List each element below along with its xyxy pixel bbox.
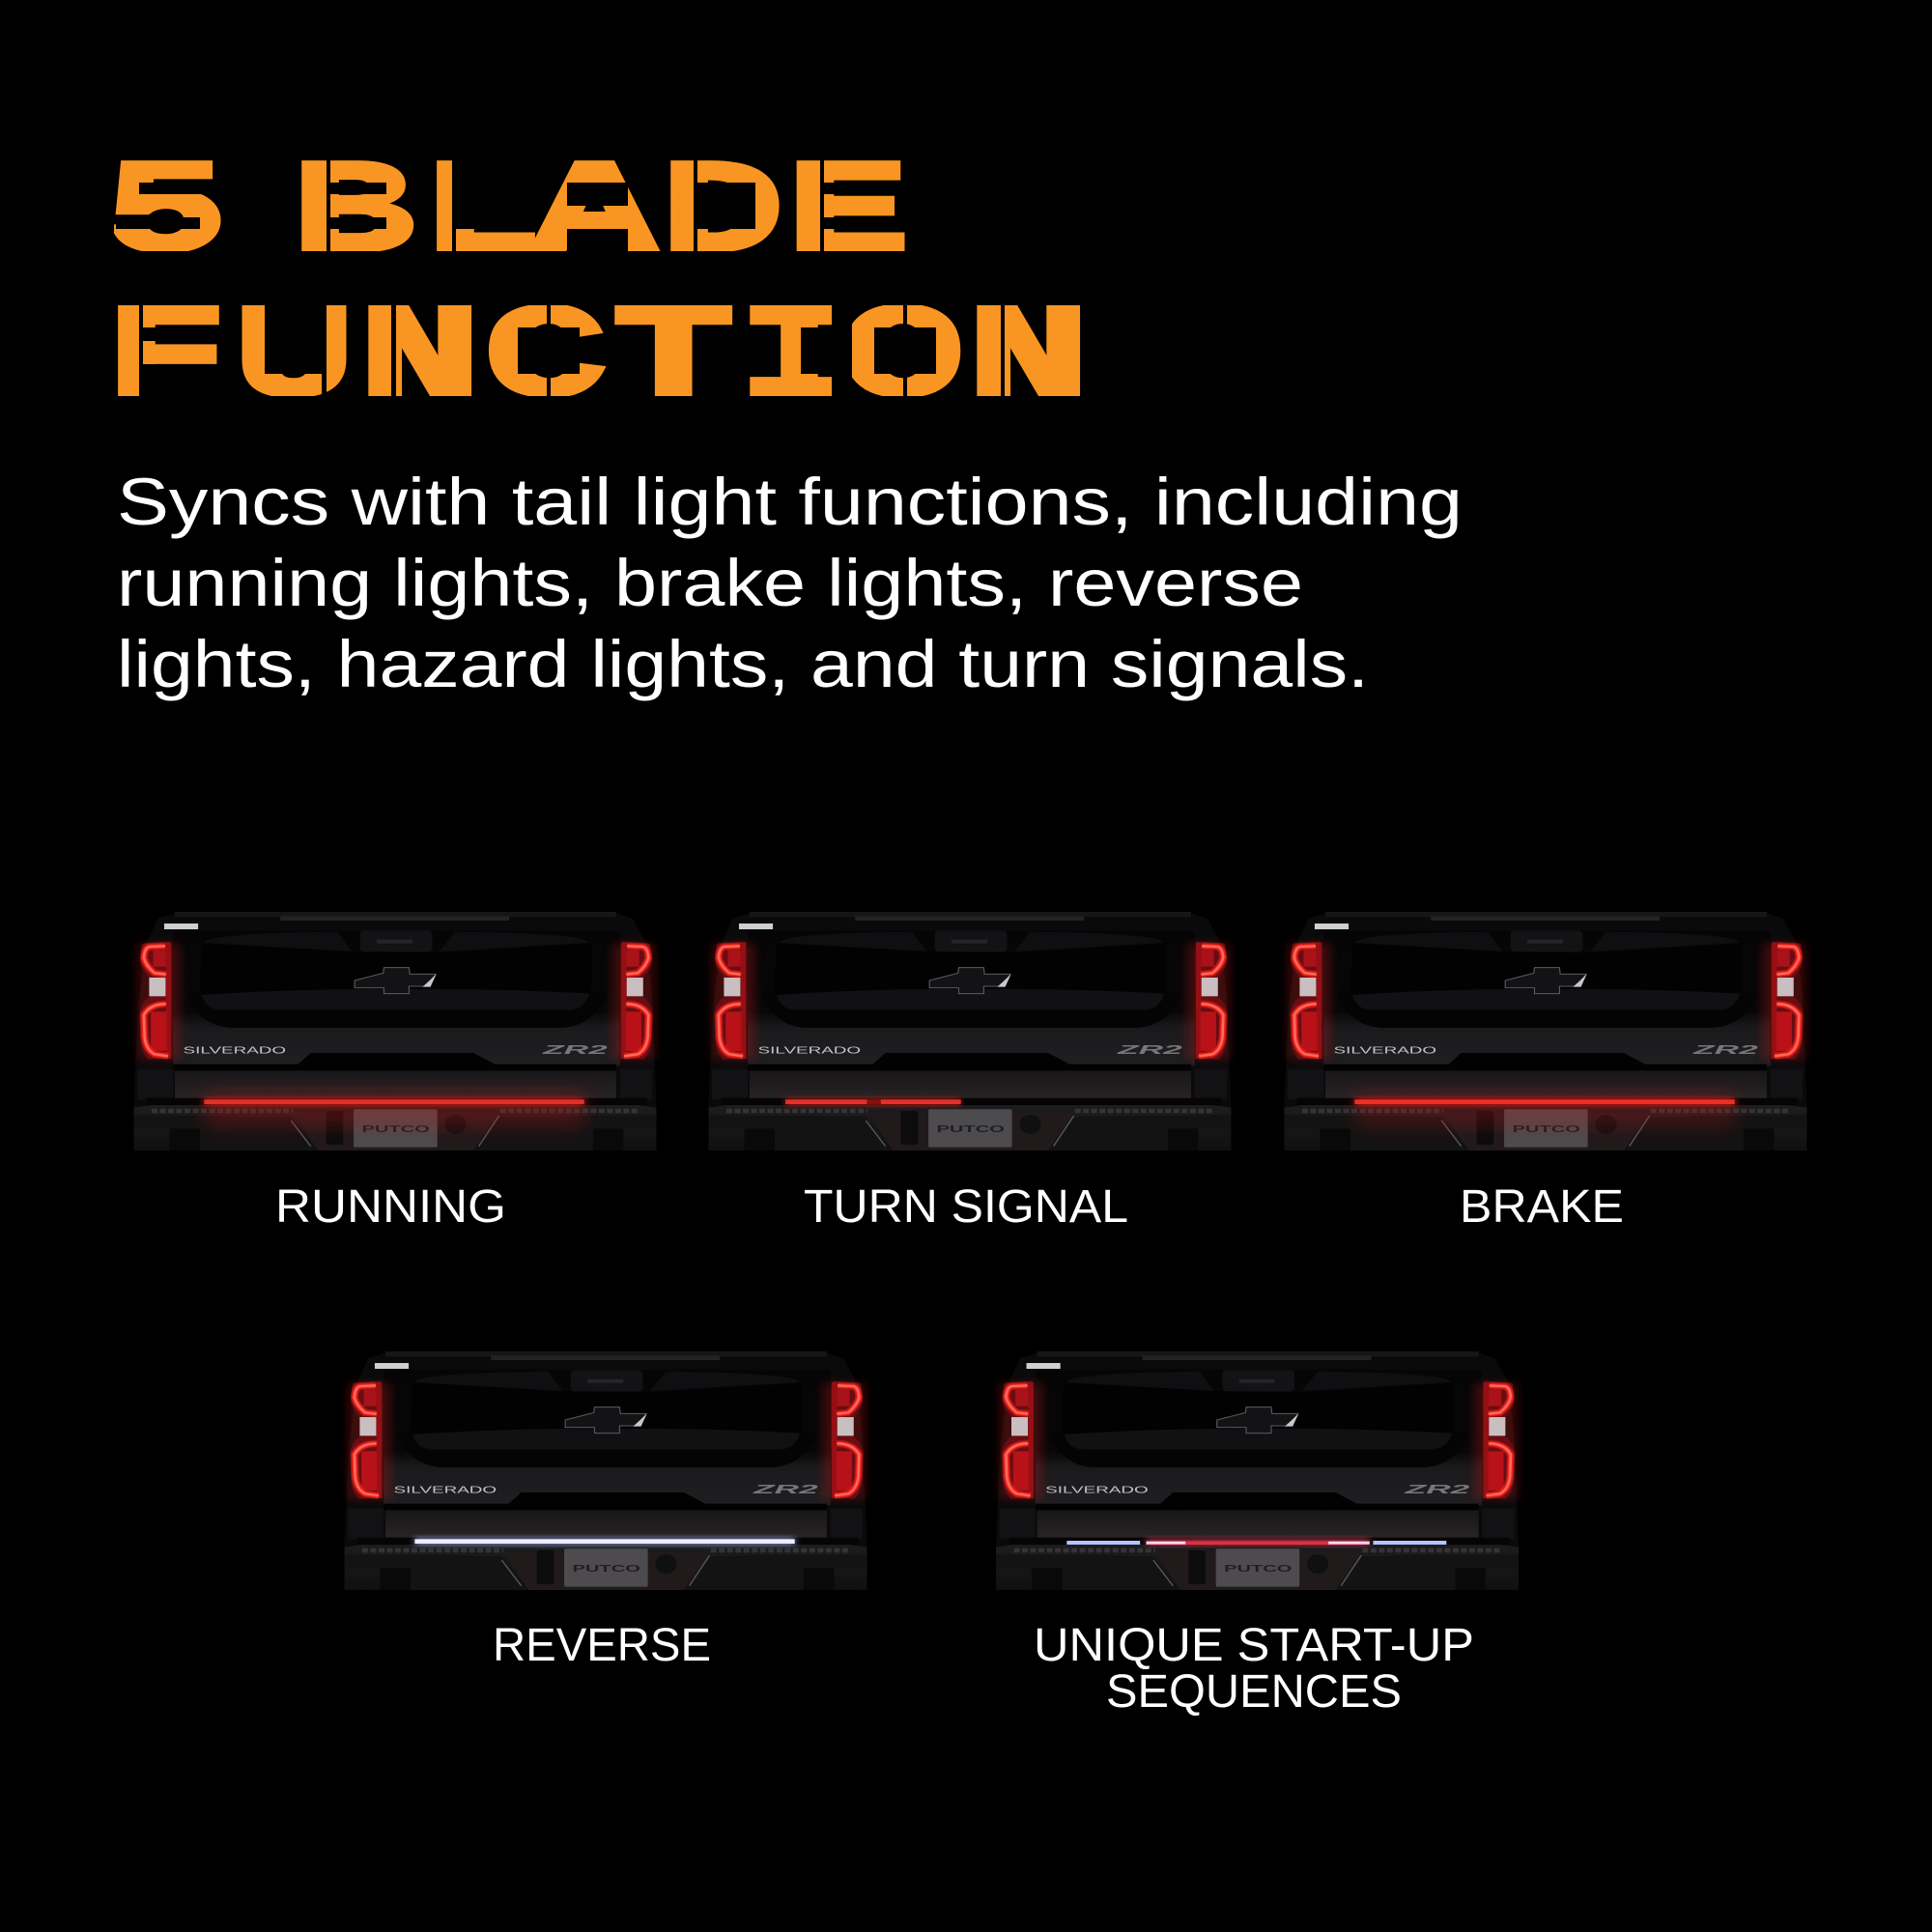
light bar segment 2: [881, 1099, 961, 1104]
underglow: [1356, 1092, 1735, 1127]
panel: unique start-up sequences: [996, 1351, 1519, 1590]
truck rear view: [133, 912, 656, 1151]
label: unique start-up sequences: SEQUENCES: [1106, 1666, 1402, 1718]
light bar glow: [785, 1098, 960, 1105]
license plate text: PUTCO: [573, 1563, 640, 1575]
label: running: RUNNING: [275, 1181, 506, 1233]
trim badge: ZR2: [752, 1483, 819, 1496]
subtitle text block: lights, hazard lights, and turn signals.: [117, 627, 1369, 701]
light bar center highlight left: [1146, 1542, 1185, 1545]
light bar right section: [1373, 1541, 1446, 1545]
truck rear view: [709, 912, 1231, 1151]
badge: SILVERADO: [1334, 1045, 1436, 1056]
subtitle text block: running lights, brake lights, reverse: [117, 546, 1303, 620]
light bar glow: [1146, 1539, 1370, 1545]
trim badge: ZR2: [1691, 1043, 1759, 1057]
truck rear view: [1285, 912, 1806, 1151]
light bar center highlight right: [1328, 1542, 1370, 1545]
panel: turn signal: [709, 912, 1231, 1151]
title: [114, 160, 1080, 396]
title letters: 5 BLADE: [105, 141, 909, 290]
panel: running: [133, 912, 656, 1151]
badge: SILVERADO: [758, 1045, 861, 1056]
license plate text: PUTCO: [1513, 1123, 1580, 1135]
light bar glow: [1354, 1098, 1735, 1105]
light bar center section: [1146, 1541, 1370, 1545]
light bar: [204, 1099, 584, 1104]
badge: SILVERADO: [184, 1045, 286, 1056]
light bar: [1354, 1099, 1735, 1104]
panel: brake: [1285, 912, 1806, 1151]
light bar left section: [1066, 1541, 1140, 1545]
title letters: [114, 160, 1080, 396]
license plate text: PUTCO: [362, 1123, 430, 1135]
label: reverse: REVERSE: [493, 1620, 711, 1671]
underglow: [205, 1092, 584, 1127]
trim badge: ZR2: [541, 1043, 609, 1057]
light bar: [414, 1539, 795, 1544]
label: unique start-up sequences: [1034, 1620, 1474, 1718]
license plate text: PUTCO: [1224, 1563, 1292, 1575]
truck rear view: [996, 1351, 1519, 1590]
badge: SILVERADO: [1045, 1485, 1149, 1495]
label: unique start-up sequences: UNIQUE START-UP: [1034, 1620, 1474, 1671]
panel: reverse: [344, 1351, 867, 1590]
light bar segment 1: [785, 1099, 867, 1104]
light bar glow: [204, 1098, 584, 1105]
subtitle text block: [117, 465, 1463, 701]
subtitle text block: Syncs with tail light functions, including: [117, 465, 1463, 539]
stencil cuts: [116, 160, 1005, 396]
trim badge: ZR2: [1403, 1483, 1471, 1496]
light bar glow: [414, 1538, 795, 1545]
label: brake: BRAKE: [1460, 1181, 1624, 1233]
badge: SILVERADO: [394, 1485, 497, 1495]
title letters: FUNCTION: [105, 286, 1090, 435]
license plate text: PUTCO: [937, 1123, 1005, 1135]
trim badge: ZR2: [1116, 1043, 1183, 1057]
label: turn signal: TURN SIGNAL: [804, 1181, 1128, 1233]
truck rear view: [344, 1351, 867, 1590]
